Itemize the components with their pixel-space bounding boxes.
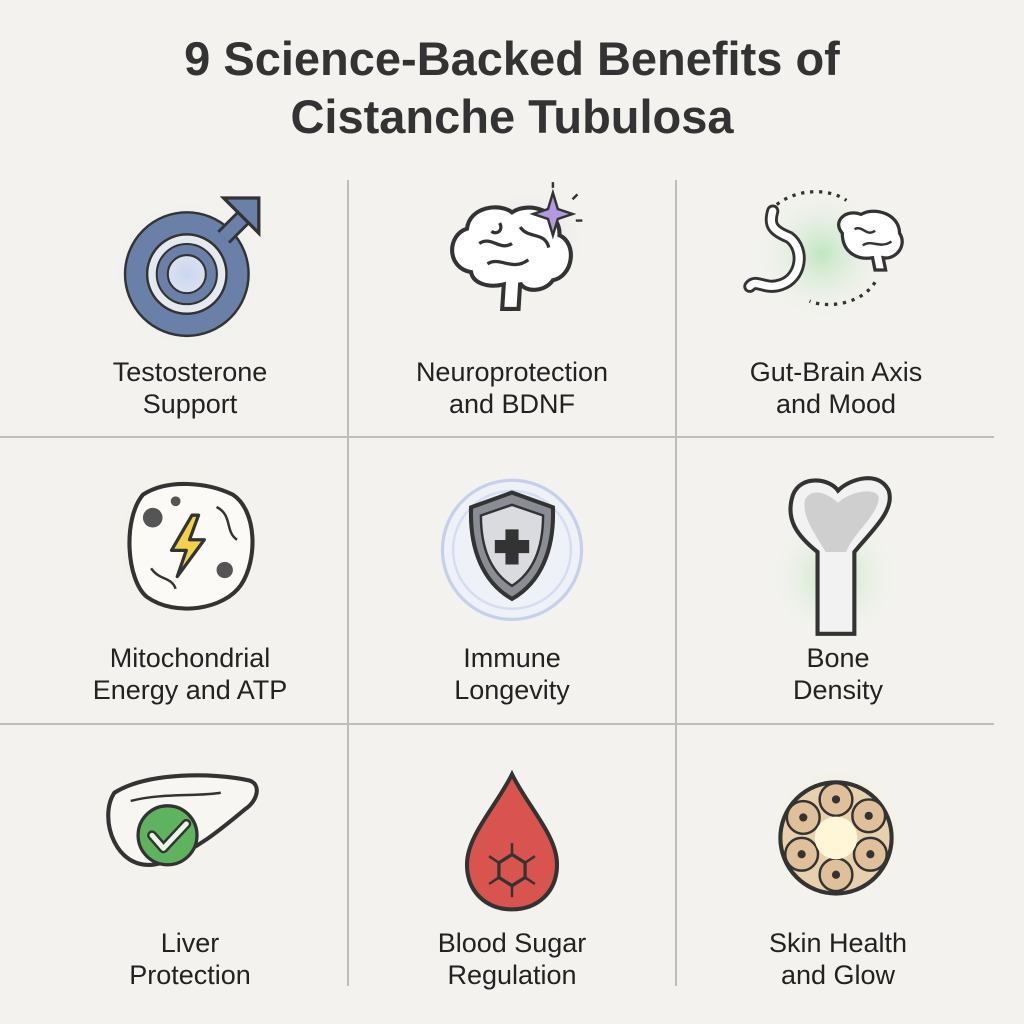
title: 9 Science-Backed Benefits of <box>184 32 840 85</box>
label: bone <box>793 643 883 705</box>
icon: mitochondria cell <box>127 482 255 611</box>
label: immune: Longevity <box>454 675 570 705</box>
label: liver: Protection <box>129 960 251 990</box>
icon: skin cells <box>778 780 894 896</box>
icon: bone <box>788 476 892 636</box>
label: mitochondrial: Mitochondrial <box>110 643 270 673</box>
label: gut brain: and Mood <box>776 389 896 419</box>
label: bone: Bone <box>806 643 870 673</box>
icon: shield <box>440 478 584 621</box>
icon: gut-brain <box>743 190 904 306</box>
icon: brain sparkle <box>450 182 582 311</box>
label: blood sugar <box>438 928 586 990</box>
label: immune <box>454 643 570 705</box>
label: testosterone: Support <box>143 389 237 419</box>
label: skin <box>769 928 907 990</box>
label: bone: Density <box>793 675 883 705</box>
label: neuroprotection: Neuroprotection <box>416 357 608 387</box>
title: Cistanche Tubulosa <box>290 90 734 143</box>
label: skin: Skin Health <box>769 928 907 958</box>
label: blood sugar: Blood Sugar <box>438 928 586 958</box>
label: gut brain <box>750 357 922 419</box>
label: mitochondrial: Energy and ATP <box>93 675 287 705</box>
icon: blood drop <box>464 770 560 912</box>
label: testosterone: Testosterone <box>113 357 267 387</box>
label: immune: Immune <box>463 643 561 673</box>
label: neuroprotection <box>416 357 608 419</box>
label: mitochondrial <box>93 643 287 705</box>
icon: liver <box>106 773 259 867</box>
icon: male symbol <box>124 196 260 338</box>
label: testosterone <box>113 357 267 419</box>
label: liver: Liver <box>161 928 219 958</box>
label: gut brain: Gut-Brain Axis <box>750 357 922 387</box>
label: liver <box>129 928 251 990</box>
label: skin: and Glow <box>781 960 895 990</box>
label: neuroprotection: and BDNF <box>449 389 575 419</box>
title <box>184 32 840 143</box>
label: blood sugar: Regulation <box>447 960 577 990</box>
